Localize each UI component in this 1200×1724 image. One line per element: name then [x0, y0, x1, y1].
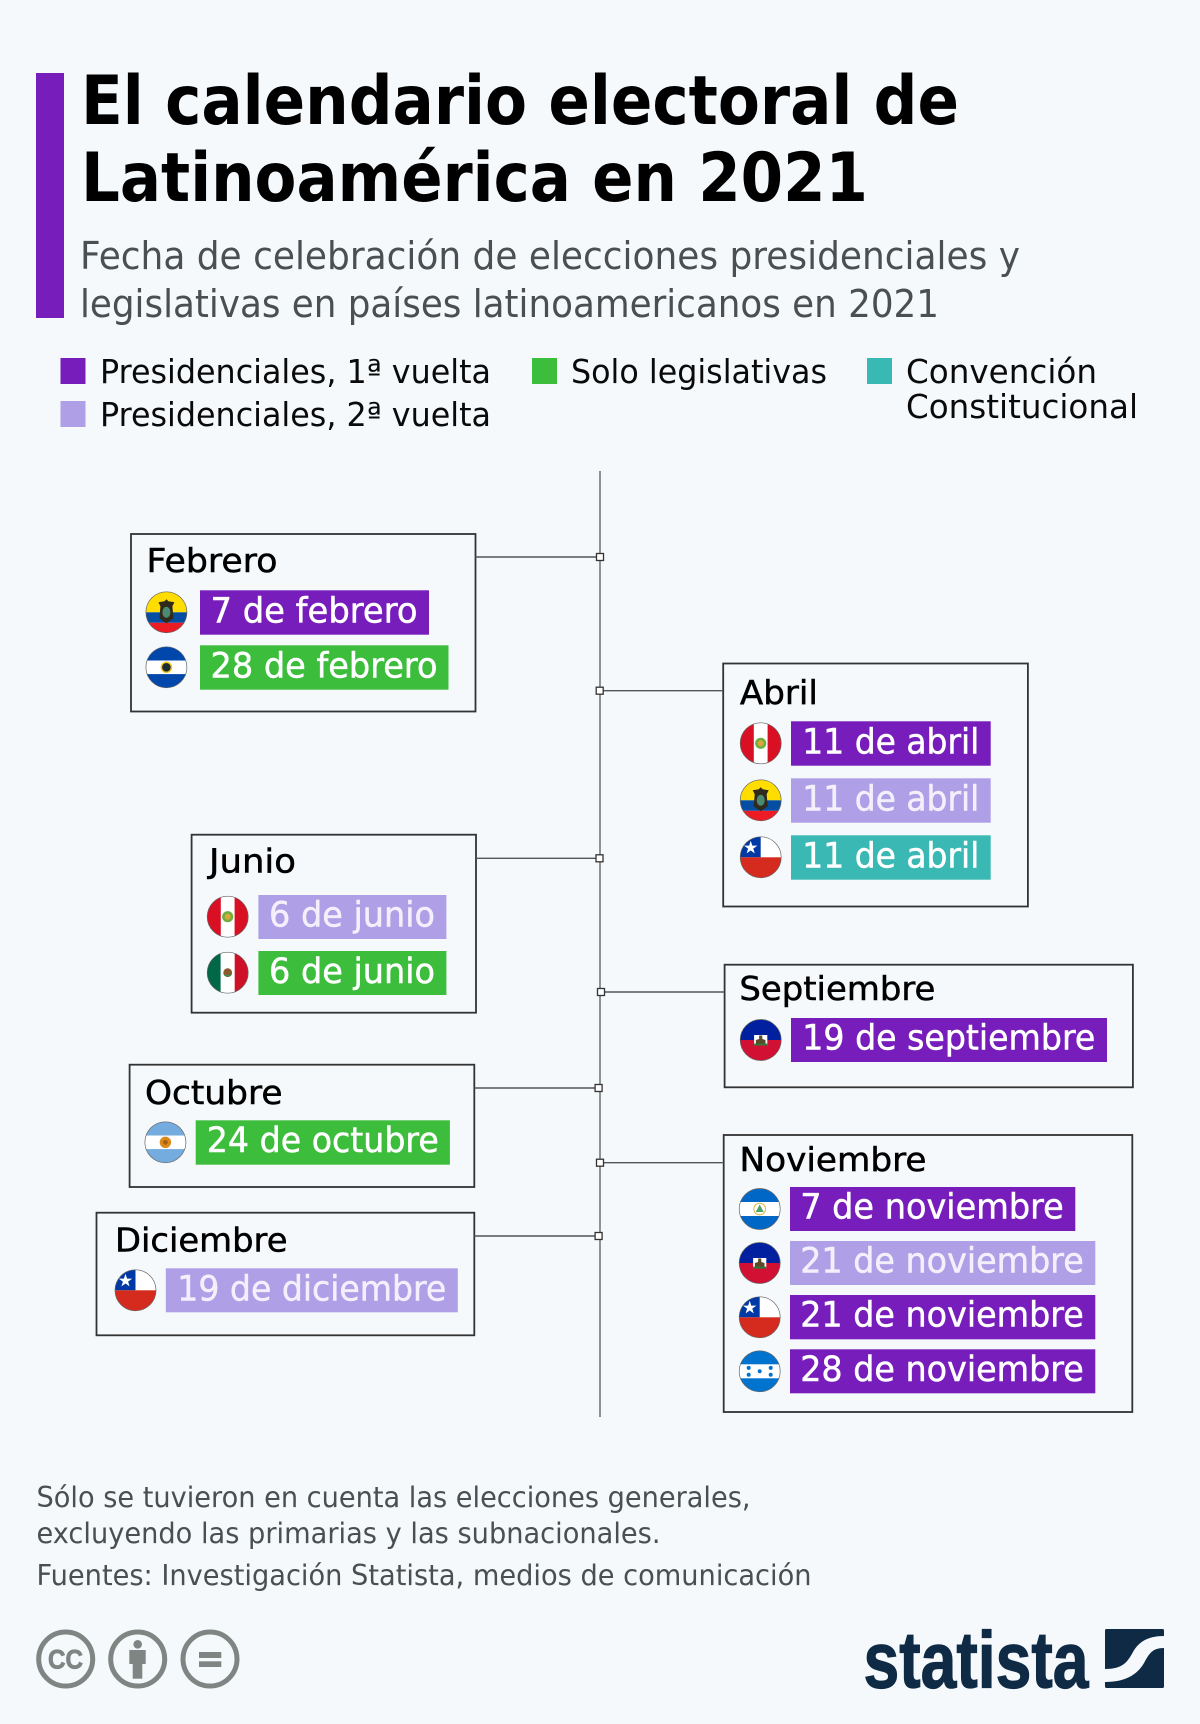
panel: abril: 11 de abril — [802, 837, 979, 877]
legend item: solo legislativas: Solo legislativas — [571, 352, 827, 391]
subtitle: legislativas en países latinoamericanos en 2021 — [80, 282, 939, 326]
panel: abril: Abril — [740, 673, 818, 712]
title: Latinoamérica en 2021 — [81, 139, 868, 218]
panel: abril: 11 de abril — [802, 722, 979, 762]
footnote and sources — [36, 1481, 812, 1592]
legend item: convención constitucional — [867, 352, 1138, 426]
legend item: convención constitucional: Convención — [906, 352, 1097, 391]
panel: noviembre: 21 de noviembre — [800, 1296, 1084, 1336]
icon: creative commons licence: CC — [48, 1644, 83, 1674]
panel: diciembre — [96, 1213, 602, 1335]
legend — [60, 352, 1138, 434]
legend item: convención constitucional: Constitucional — [906, 387, 1138, 426]
panel: abril — [596, 664, 1028, 906]
legend item: presidenciales primera vuelta: Presidenciales, 1ª vuelta — [100, 352, 491, 391]
panel: junio: 6 de junio — [269, 952, 435, 992]
icon: creative commons licence — [39, 1632, 237, 1686]
footnote and sources: Sólo se tuvieron en cuenta las elecciones generales, — [36, 1481, 750, 1514]
panel: noviembre: 28 de noviembre — [800, 1350, 1084, 1390]
title — [81, 62, 959, 218]
panel: febrero: 7 de febrero — [210, 592, 418, 632]
panel: febrero: 28 de febrero — [210, 646, 438, 686]
title: El calendario electoral de — [81, 62, 959, 141]
panel: junio — [192, 835, 603, 1013]
footnote and sources: Fuentes: Investigación Statista, medios de comunicación — [36, 1559, 812, 1592]
panel: diciembre: 19 de diciembre — [177, 1269, 446, 1309]
panel: abril: 11 de abril — [802, 780, 979, 820]
panel: noviembre — [596, 1135, 1132, 1412]
panel: febrero: Febrero — [146, 541, 278, 580]
panel: noviembre: 21 de noviembre — [800, 1242, 1084, 1282]
panel: diciembre: Diciembre — [115, 1221, 288, 1260]
footnote and sources: excluyendo las primarias y las subnacionales. — [36, 1517, 660, 1550]
panel: junio: Junio — [207, 842, 296, 881]
panel: octubre — [130, 1065, 602, 1187]
panel: octubre: Octubre — [145, 1073, 282, 1112]
panel: septiembre: Septiembre — [739, 969, 935, 1008]
panel: junio: 6 de junio — [269, 896, 435, 936]
subtitle: Fecha de celebración de elecciones presidenciales y — [80, 234, 1020, 278]
timeline axis — [599, 471, 601, 1417]
statista logo: statista — [864, 1616, 1089, 1704]
panel: febrero — [131, 534, 604, 712]
subtitle — [80, 234, 1020, 326]
title accent bar — [36, 73, 64, 318]
panel: septiembre: 19 de septiembre — [802, 1018, 1095, 1058]
legend item: presidenciales segunda vuelta: Presidenciales, 2ª vuelta — [100, 395, 491, 434]
panel: octubre: 24 de octubre — [207, 1121, 439, 1161]
panel: noviembre: Noviembre — [740, 1140, 926, 1179]
panel: septiembre — [598, 965, 1133, 1087]
panel: noviembre: 7 de noviembre — [800, 1187, 1064, 1227]
